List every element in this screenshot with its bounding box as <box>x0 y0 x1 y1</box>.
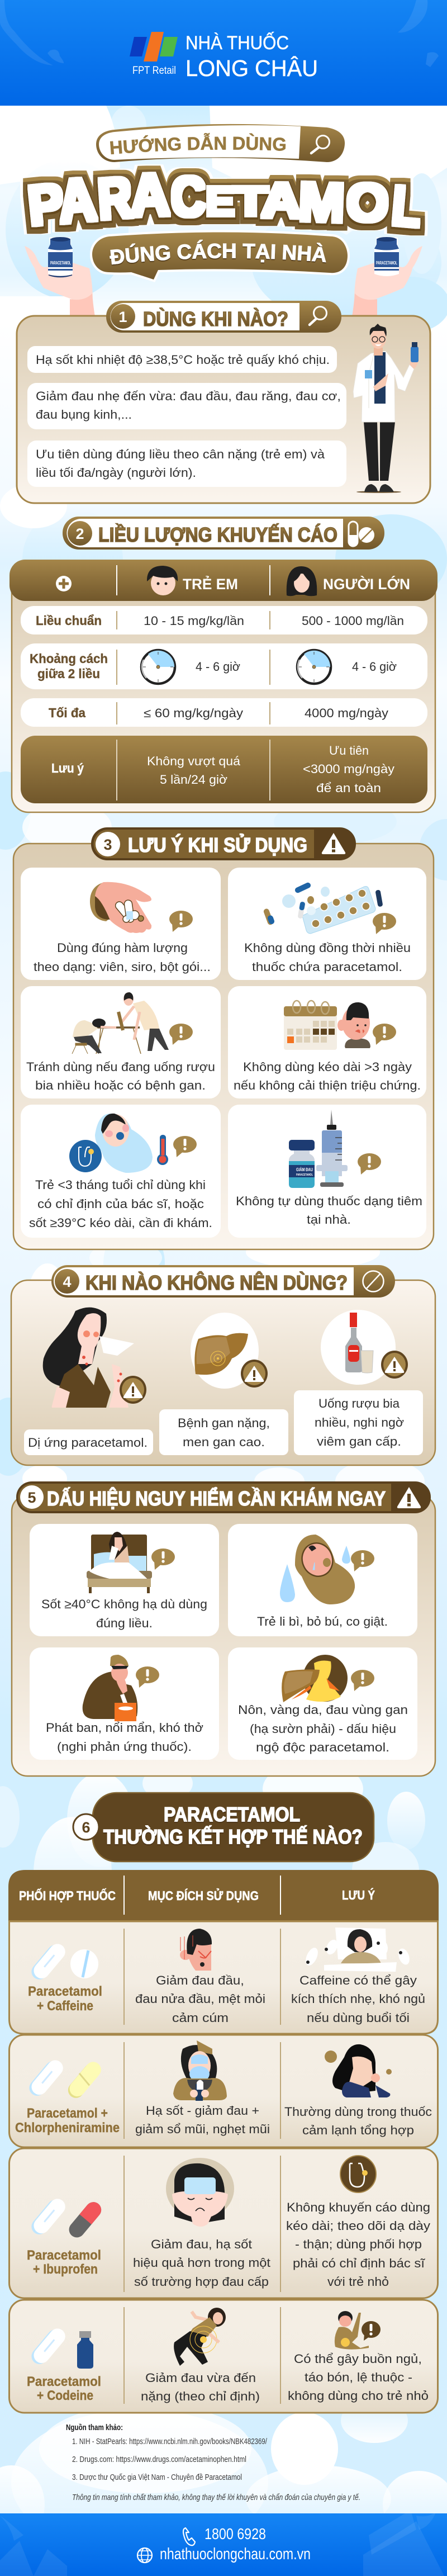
row: ibuprofen <box>9 2148 438 2298</box>
card: liver toxicity: ngộ độc paracetamol. <box>256 1740 389 1754</box>
row: maximum dose: 4000 mg/ngày <box>305 706 388 720</box>
row: chlorpheniramine: Hạ sốt - giảm đau + <box>146 2104 259 2118</box>
heading: khi nao khong nen dung: KHI NÀO KHÔNG NÊN DÙNG? <box>85 1271 348 1294</box>
icon: woman in bed <box>87 1532 152 1593</box>
card: high fever: đúng liều. <box>96 1616 153 1630</box>
paracetamol wordmark: A <box>129 160 171 229</box>
card: babies under 3 months: sốt ≥39°C kéo dài, cần đi khám. <box>29 1216 212 1230</box>
icon: tablet and syrup bottle <box>28 2324 93 2369</box>
icon: baby with stethoscope and thermometer <box>69 1114 168 1173</box>
paracetamol wordmark: M <box>297 171 346 234</box>
icon: right hand holding bottle <box>351 237 422 321</box>
text card: pain relief <box>27 383 346 429</box>
card: avoid alcohol: bia nhiều hoặc có bệnh gan. <box>35 1078 206 1092</box>
row: ibuprofen: kéo dài; theo dõi dạ dày <box>286 2219 430 2233</box>
icon: stethoscope <box>340 2156 376 2193</box>
row: ibuprofen: Giảm đau, hạ sốt <box>151 2237 252 2251</box>
note: liver disease: men gan cao. <box>183 1435 265 1449</box>
paracetamol wordmark: O <box>345 172 391 234</box>
heading: dau hieu nguy hiem: DẤU HIỆU NGUY HIỂM CẦN KHÁM NGAY <box>47 1486 386 1510</box>
card: not longer than 3 days: Không dùng kéo dài >3 ngày <box>243 1060 412 1074</box>
paracetamol wordmark: C <box>171 165 205 228</box>
row: ibuprofen: với trẻ nhỏ <box>327 2275 389 2289</box>
card: liver toxicity: (hạ sườn phải) - dấu hiệu <box>250 1722 396 1736</box>
row: chlorpheniramine <box>9 2035 438 2147</box>
icon: woman with cold pack <box>166 2158 234 2227</box>
speech pill: dung cach tai nha <box>90 230 350 282</box>
note: alcohol: Uống rượu bia <box>318 1396 400 1410</box>
row: standard dose <box>21 606 427 634</box>
heading: luu y khi su dung: 3 <box>103 836 112 853</box>
row: chlorpheniramine: cảm lạnh tổng hợp <box>302 2123 414 2137</box>
card: high fever: Sốt ≥40°C không hạ dù dùng <box>41 1597 207 1611</box>
text card: dosing priority: Ưu tiên dùng đúng liều theo cân nặng (trẻ em) và <box>36 447 325 461</box>
heading: lieu luong khuyen cao <box>63 517 384 550</box>
row: ibuprofen: Không khuyến cáo dùng <box>287 2200 430 2214</box>
panel: 2 dosage table <box>9 560 438 812</box>
card: high fever <box>30 1524 219 1636</box>
card: rash <box>30 1647 219 1760</box>
card: rash: (nghi phản ứng thuốc). <box>57 1740 192 1754</box>
panel: 1 when to use <box>17 301 430 503</box>
row: dose interval: Khoảng cách <box>30 651 108 666</box>
row: ibuprofen: - thận; dùng phối hợp <box>295 2237 422 2251</box>
icon: child face <box>147 566 178 595</box>
icon: vial and syringe <box>289 1110 348 1188</box>
search pill: huong dan dung <box>96 124 345 162</box>
references: 3. Dược thư Quốc gia Việt Nam - Chuyên đề Paracetamol <box>72 2473 242 2482</box>
table header: PHỐI HỢP THUỐC <box>19 1888 116 1903</box>
text card: fever <box>27 346 337 373</box>
row: ibuprofen: + Ibuprofen <box>33 2262 98 2277</box>
paracetamol wordmark: E <box>206 179 235 224</box>
icon: right hand holding bottle: PARACETAMOL <box>376 261 397 266</box>
card: no injectable at home <box>228 1105 426 1238</box>
icon: tablets <box>28 1940 98 1983</box>
heading: dau hieu nguy hiem <box>16 1481 431 1513</box>
icon: jaundiced person and liver <box>282 1655 348 1702</box>
paracetamol wordmark: A <box>261 173 302 228</box>
row: standard dose: 500 - 1000 mg/lần <box>302 614 404 628</box>
icon: calendar <box>284 1001 337 1050</box>
card: correct strength: theo dạng: viên, siro, bột gói... <box>34 960 211 974</box>
icon: person with abdominal pain <box>174 2308 226 2366</box>
text card: dosing priority <box>27 441 346 487</box>
contact: phone <box>183 2525 266 2545</box>
heading: dung khi nao: DÙNG KHI NÀO? <box>143 307 288 330</box>
card: lethargic child: Trẻ li bì, bỏ bú, co giật. <box>257 1614 388 1628</box>
row: dose interval: giữa 2 liều <box>37 666 100 681</box>
row: chlorpheniramine: Thường dùng trong thuốc <box>284 2105 432 2119</box>
icon: clock child <box>141 650 175 684</box>
heading: paracetamol combinations: THƯỜNG KẾT HỢP THẾ NÀO? <box>103 1825 363 1848</box>
icon: left hand holding bottle: PARACETAMOL <box>50 261 71 266</box>
table header <box>8 1870 439 1922</box>
text card: pain relief: đau bụng kinh,... <box>36 408 132 422</box>
icon: toddler <box>335 2311 369 2350</box>
icon: insomnia <box>303 1928 412 1972</box>
paracetamol wordmark: T <box>233 179 269 224</box>
card: avoid alcohol <box>21 986 221 1098</box>
references: 1. NIH - StatPearls: https://www.ncbi.nlm.nih.gov/books/NBK482369/ <box>72 2437 268 2446</box>
note: alcohol: nhiều, nghi ngờ <box>315 1415 404 1429</box>
icon: crying baby <box>280 1535 355 1604</box>
row: caffeine <box>9 1921 438 2034</box>
heading: luu y khi su dung: LƯU Ý KHI SỬ DỤNG <box>128 833 307 856</box>
logo: FPT Retail: FPT Retail <box>132 65 176 77</box>
row: standard dose: 10 - 15 mg/kg/lần <box>144 614 244 628</box>
card: babies under 3 months: Trẻ <3 tháng tuổi chỉ dùng khi <box>35 1178 206 1192</box>
references: Thông tin mang tính chất tham khảo, không thay thế lời khuyên và chẩn đoán của chuyên gia y tế. <box>72 2493 360 2502</box>
card: babies under 3 months: có chỉ định của bác sĩ, hoặc <box>37 1197 204 1211</box>
heading: paracetamol combinations: PARACETAMOL <box>164 1803 300 1826</box>
card: no duplicates: thuốc chứa paracetamol. <box>252 960 402 974</box>
table header: TRẺ EM <box>183 575 238 593</box>
table header: NGƯỜI LỚN <box>323 575 410 593</box>
note: alcohol: viêm gan cấp. <box>317 1434 401 1448</box>
logo: FPT Retail <box>130 32 178 77</box>
row: ibuprofen: Paracetamol <box>27 2248 101 2263</box>
row: maximum dose <box>21 698 427 727</box>
row: note: Lưu ý <box>51 761 84 775</box>
text card: pain relief: Giảm đau nhẹ đến vừa: đau đầu, đau răng, đau cơ, <box>36 389 341 403</box>
table header <box>9 560 438 601</box>
row: ibuprofen: hiệu quả hơn trong một <box>133 2256 270 2270</box>
icon: blister pack and capsules <box>263 882 383 934</box>
row: maximum dose: Tối đa <box>49 705 85 720</box>
table header: MỤC ĐÍCH SỬ DỤNG <box>148 1887 259 1903</box>
panel: 3 notes when using <box>13 827 434 1249</box>
row: note: Không vượt quá <box>147 754 241 768</box>
row: caffeine: kích thích nhẹ, khó ngủ <box>291 1992 425 2006</box>
row: codeine: Giảm đau vừa đến <box>145 2371 256 2385</box>
row: caffeine: Caffeine có thể gây <box>299 1973 417 1987</box>
note: liver disease <box>159 1409 288 1455</box>
heading: paracetamol combinations: 6 <box>82 1819 91 1836</box>
search pill: huong dan dung: HƯỚNG DẪN DÙNG <box>110 133 286 154</box>
row: maximum dose: ≤ 60 mg/kg/ngày <box>144 706 243 720</box>
icon: liver <box>191 1313 259 1389</box>
icon: tablet and capsule <box>28 2195 104 2241</box>
note: alcohol <box>294 1390 423 1455</box>
row: chlorpheniramine: Chlorpheniramine <box>15 2120 120 2135</box>
references: 2. Drugs.com: https://www.drugs.com/acetaminophen.html <box>72 2455 246 2464</box>
row: ibuprofen: phải có chỉ định bác sĩ <box>293 2256 425 2270</box>
row: chlorpheniramine: Paracetamol + <box>27 2106 108 2121</box>
footer banner <box>0 2510 447 2576</box>
note: allergy: Dị ứng paracetamol. <box>28 1436 148 1450</box>
contact: website: nhathuoclongchau.com.vn <box>160 2545 311 2563</box>
row: note: 5 lần/24 giờ <box>160 773 227 787</box>
row: note: <3000 mg/ngày <box>303 762 394 776</box>
heading: lieu luong khuyen cao: 2 <box>75 525 84 542</box>
heading: paracetamol combinations <box>73 1793 374 1862</box>
icon: woman with allergy <box>43 1308 134 1408</box>
row: dose interval: 4 - 6 giờ <box>196 660 240 674</box>
references: Nguồn tham khảo: <box>66 2423 123 2432</box>
heading: khi nao khong nen dung <box>51 1265 395 1298</box>
paracetamol wordmark: P <box>25 172 66 237</box>
row: dose interval: 4 - 6 giờ <box>352 660 397 674</box>
card: liver toxicity <box>228 1647 417 1760</box>
row: caffeine: Paracetamol <box>28 1984 102 1999</box>
table header: LƯU Ý <box>342 1887 375 1902</box>
card: not longer than 3 days: nếu không cải thiện triệu chứng. <box>234 1078 421 1092</box>
icon: man with sweater and tissue box <box>83 1655 137 1721</box>
card: correct strength: Dùng đúng hàm lượng <box>57 941 188 955</box>
icon: headache <box>180 1929 212 1971</box>
icon: alert bubble <box>362 2321 381 2341</box>
references <box>66 2423 360 2502</box>
row: codeine: Có thể gây buồn ngủ, <box>294 2352 422 2366</box>
icon: pharmacist <box>353 324 419 493</box>
card: no duplicates <box>228 868 426 980</box>
main title block <box>20 124 428 315</box>
heading: lieu luong khuyen cao: LIỀU LƯỢNG KHUYẾN CÁO <box>98 523 337 546</box>
text card: fever: Hạ sốt khi nhiệt độ ≥38,5°C hoặc trẻ quấy khó chịu. <box>36 353 330 367</box>
top header banner <box>0 0 447 106</box>
row: caffeine: cảm cúm <box>172 2011 229 2025</box>
card: no injectable at home: tại nhà. <box>307 1213 351 1227</box>
icon: masked sick person <box>173 2040 227 2101</box>
icon: adult face <box>287 566 317 596</box>
row: note: để an toàn <box>316 781 381 795</box>
icon: liquor bottle <box>321 1310 396 1385</box>
speech pill: dung cach tai nha: ĐÚNG CÁCH TẠI NHÀ <box>110 239 326 266</box>
note: liver disease: Bệnh gan nặng, <box>178 1416 270 1430</box>
logo wordmark <box>186 32 318 81</box>
paracetamol wordmark: A <box>55 164 99 236</box>
icon: drunk people at table <box>72 992 169 1054</box>
icon: vial and syringe: GIẢM ĐAU <box>296 1167 313 1172</box>
note: allergy <box>24 1429 153 1455</box>
logo wordmark: NHÀ THUỐC <box>186 32 289 54</box>
card: avoid alcohol: Tránh dùng nếu đang uống rượu <box>26 1060 215 1074</box>
row: note: Ưu tiên <box>329 744 369 757</box>
icon: sick man <box>337 1002 370 1048</box>
row: caffeine: đau nửa đầu, mệt mỏi <box>135 1992 265 2006</box>
row: codeine: + Codeine <box>37 2388 93 2403</box>
contact: phone: 1800 6928 <box>205 2525 266 2542</box>
card: lethargic child <box>228 1524 417 1636</box>
row: ibuprofen: số trường hợp đau cấp <box>134 2275 269 2289</box>
panel: 4 when not to use <box>11 1265 435 1465</box>
card: babies under 3 months <box>21 1105 221 1238</box>
icon: hand with pills <box>90 882 151 933</box>
icon: vial and syringe: PARACETAMOL <box>296 1173 313 1177</box>
heading: dau hieu nguy hiem: 5 <box>27 1489 36 1506</box>
heading: khi nao khong nen dung: 4 <box>63 1273 72 1290</box>
paracetamol wordmark: L <box>389 173 424 239</box>
text card: dosing priority: liều tối đa/ngày (người lớn). <box>36 466 196 480</box>
table: drug combinations <box>8 1870 439 2413</box>
row: dose interval <box>21 643 427 689</box>
paracetamol wordmark: R <box>96 165 134 231</box>
card: liver toxicity: Nôn, vàng da, đau vùng gan <box>238 1703 408 1717</box>
icon: tablets white and yellow <box>26 2056 104 2101</box>
icon: left hand holding bottle <box>25 237 96 321</box>
row: codeine: táo bón, lệ thuộc - <box>305 2370 412 2384</box>
heading: dung khi nao <box>106 301 341 333</box>
icon: clock adult <box>297 650 331 684</box>
card: no duplicates: Không dùng đồng thời nhiều <box>244 941 411 955</box>
row: codeine: nặng (theo chỉ định) <box>141 2389 260 2403</box>
row: chlorpheniramine: giảm sổ mũi, nghẹt mũi <box>135 2122 270 2136</box>
row: codeine <box>9 2300 438 2413</box>
row: codeine: không dùng cho trẻ nhỏ <box>288 2389 429 2403</box>
logo wordmark: LONG CHÂU <box>186 55 318 81</box>
paracetamol wordmark <box>25 160 424 239</box>
row: note <box>21 736 427 803</box>
heading: dung khi nao: 1 <box>118 309 127 325</box>
row: caffeine: nếu dùng buổi tối <box>307 2011 410 2025</box>
heading: luu y khi su dung <box>91 827 356 860</box>
card: rash: Phát ban, nổi mẩn, khó thở <box>46 1721 203 1735</box>
card: not longer than 3 days <box>228 986 426 1098</box>
icon: coughing woman <box>325 2044 392 2097</box>
card: correct strength <box>21 868 221 980</box>
panel: 5 danger signs <box>12 1481 435 1776</box>
row: standard dose: Liều chuẩn <box>36 613 102 628</box>
row: caffeine: Giảm đau đầu, <box>156 1973 244 1987</box>
card: no injectable at home: Không tự dùng thuốc dạng tiêm <box>236 1194 422 1208</box>
row: codeine: Paracetamol <box>27 2374 101 2389</box>
row: caffeine: + Caffeine <box>37 1999 93 2014</box>
